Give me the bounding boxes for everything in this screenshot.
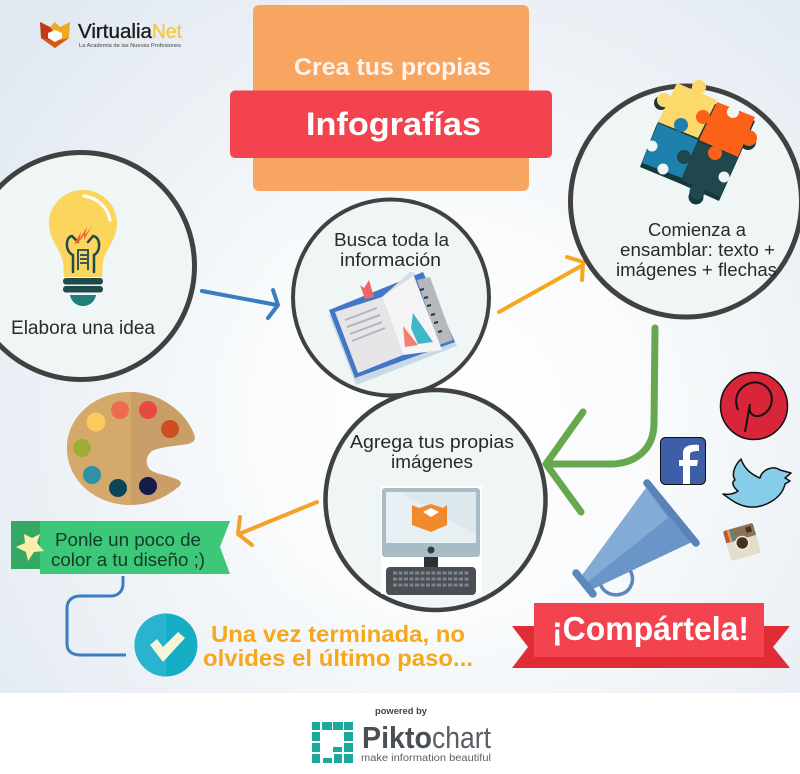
icon: Instagram [723, 523, 761, 561]
arrow: blue to Busca [202, 290, 278, 318]
icon: paint palette [67, 392, 195, 505]
icon: Twitter [723, 459, 791, 507]
callout: último paso [203, 621, 473, 671]
logo: VirtualiaNet: Net [152, 21, 182, 43]
tagline: make information beautiful [361, 752, 491, 764]
icon: Piktochart logo [312, 722, 353, 763]
title line 2: Infografías [306, 106, 481, 142]
icon: check badge [134, 614, 198, 676]
logo: VirtualiaNet: La Academia de las Nuevas Profesiones [79, 43, 181, 49]
arrow: green to Agrega [546, 328, 655, 512]
panel: Agrega tus propias imágenes [326, 390, 546, 610]
callout: último paso: Una vez terminada, no [211, 621, 465, 647]
footer: powered by Piktochart [312, 706, 491, 764]
label: Busca toda la [334, 230, 450, 250]
banner text: ¡Compártela! [552, 610, 749, 647]
icon: computer [381, 486, 482, 595]
connector: blue line [67, 576, 126, 655]
label: imágenes + flechas [616, 260, 777, 280]
powered by: powered by [375, 706, 427, 716]
label: Elabora una idea [11, 318, 155, 339]
title block [230, 5, 552, 191]
label [616, 220, 777, 280]
wordmark: Pikto [362, 720, 432, 755]
footer: powered by Piktochart: chart [432, 720, 491, 755]
logo: VirtualiaNet: Virtualia [78, 21, 153, 43]
callout: último paso: olvides el último paso... [203, 645, 473, 671]
label [51, 530, 205, 570]
label [350, 432, 514, 472]
logo: VirtualiaNet [40, 21, 182, 49]
label: Agrega tus propias [350, 432, 514, 452]
label: Comienza a [648, 220, 747, 240]
panel: Busca toda la información [293, 200, 489, 396]
icon: open book [329, 272, 457, 385]
banner: ¡Compártela! [512, 603, 790, 668]
icon: light bulb [49, 190, 117, 306]
arrow: orange to Comienza [499, 257, 583, 312]
panel: Comienza a ensamblar [570, 80, 800, 317]
red title band [230, 90, 552, 158]
icon: megaphone [576, 483, 696, 595]
icon: puzzle [640, 80, 757, 204]
label: color a tu diseño ;) [51, 550, 205, 570]
icon: star [16, 534, 44, 561]
icon: Facebook [660, 438, 706, 484]
label: Ponle un poco de [55, 530, 201, 550]
orange title panel [253, 5, 529, 191]
label: información [340, 250, 441, 270]
label [334, 230, 450, 270]
label: ensamblar: texto + [620, 240, 775, 260]
label: imágenes [391, 452, 473, 472]
panel: Elabora una idea [0, 152, 194, 380]
ribbon: Ponle un poco de color [11, 521, 230, 574]
title line 1: Crea tus propias [294, 54, 491, 81]
arrow: orange to ribbon [238, 502, 317, 545]
icon: Pinterest [720, 372, 788, 440]
